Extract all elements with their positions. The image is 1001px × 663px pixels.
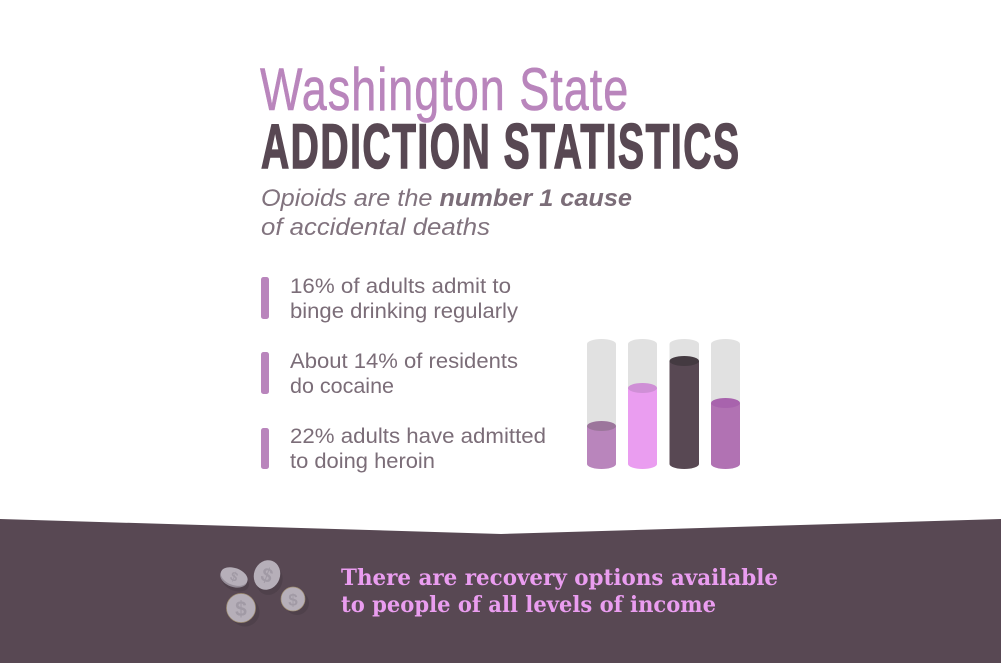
subtitle: Opioids are the number 1 cause bbox=[261, 185, 632, 212]
statistic: heroin bbox=[261, 425, 546, 473]
statistic: binge drinking: binge drinking regularly bbox=[290, 300, 519, 323]
coin 1: $ bbox=[228, 568, 241, 585]
cylinder 3 bbox=[670, 339, 699, 469]
statistic: cocaine: do cocaine bbox=[290, 375, 394, 398]
cylinder 1 bbox=[587, 339, 616, 469]
statistic: binge drinking: 16% of adults admit to bbox=[290, 275, 511, 298]
cylinder 2 bbox=[628, 339, 657, 469]
title: Addiction Statistics: ADDICTION STATISTICS bbox=[261, 113, 739, 182]
title: Washington State: Washington State bbox=[260, 57, 628, 124]
statistic: heroin: to doing heroin bbox=[290, 450, 435, 473]
cylinder 4 bbox=[711, 339, 740, 469]
coin 2: $ bbox=[258, 564, 276, 588]
statistic: cocaine bbox=[261, 350, 518, 398]
statistic: cocaine: About 14% of residents bbox=[290, 350, 518, 373]
callout text: There are recovery options available bbox=[341, 565, 778, 591]
callout text bbox=[341, 565, 778, 618]
subtitle: of accidental deaths bbox=[261, 214, 490, 241]
subtitle bbox=[261, 185, 632, 241]
coin 4: $ bbox=[288, 590, 298, 610]
icon: coins bbox=[216, 556, 309, 626]
bottom band bbox=[0, 519, 1001, 663]
callout text: to people of all levels of income bbox=[341, 592, 716, 618]
coin 3: $ bbox=[235, 598, 247, 621]
cylinder chart bbox=[587, 339, 740, 469]
statistic: binge drinking bbox=[261, 275, 519, 323]
statistic: heroin: 22% adults have admitted bbox=[290, 425, 546, 448]
